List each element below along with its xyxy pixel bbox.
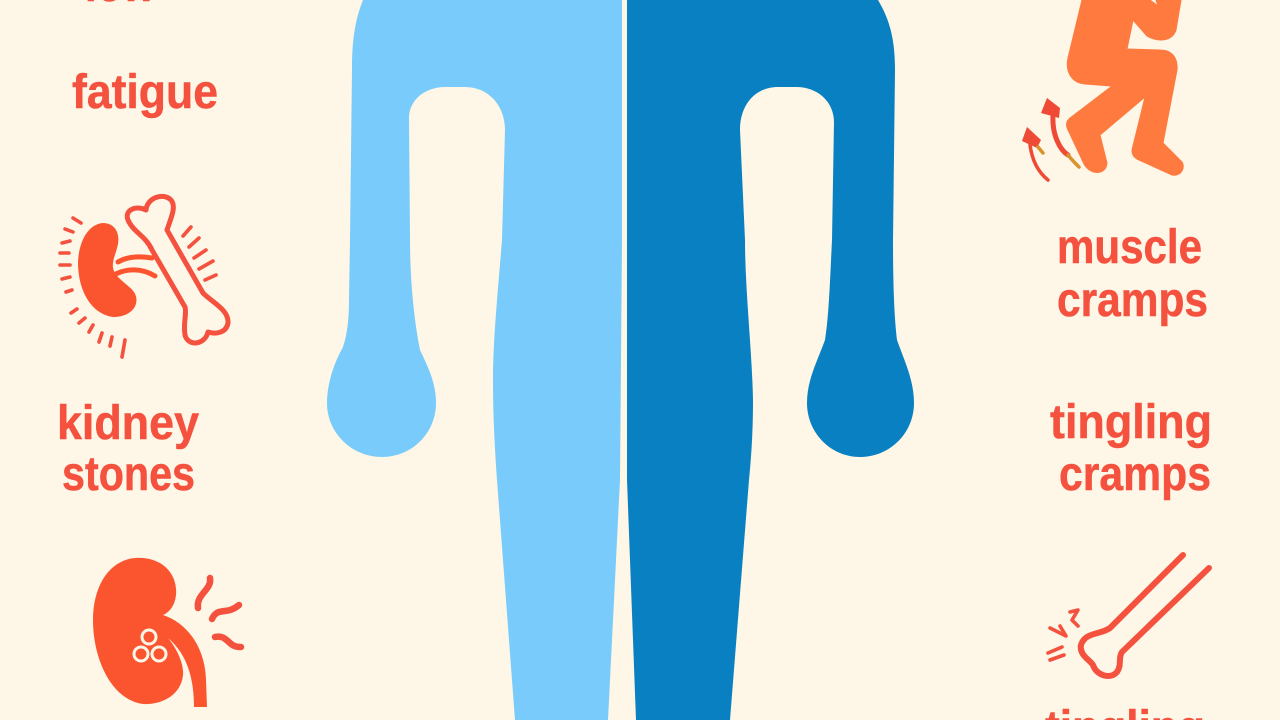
label: kidney stones xyxy=(57,397,199,501)
label: muscle cramps xyxy=(1057,221,1208,327)
icon: crouching figure with cramp arrows xyxy=(1022,0,1183,180)
left half of body: light blue xyxy=(327,0,622,720)
label: kidney stones: kidney xyxy=(57,397,199,450)
label: muscle cramps: cramps xyxy=(1057,274,1208,327)
icon: tingling bone xyxy=(1048,555,1209,676)
label: kidney stones: stones xyxy=(62,448,195,501)
label: muscle cramps: muscle xyxy=(1057,221,1202,274)
right half of body: dark blue xyxy=(627,0,914,720)
label: tingling cramps xyxy=(1050,396,1212,501)
icon: kidney and bone xyxy=(60,196,228,357)
body figure xyxy=(327,0,914,720)
label: fatigue: fatigue xyxy=(72,66,218,119)
label: tingling cramps: cramps xyxy=(1059,448,1211,501)
icon: kidney with stone xyxy=(93,558,241,707)
label: tingling cramps: tingling xyxy=(1050,396,1212,449)
